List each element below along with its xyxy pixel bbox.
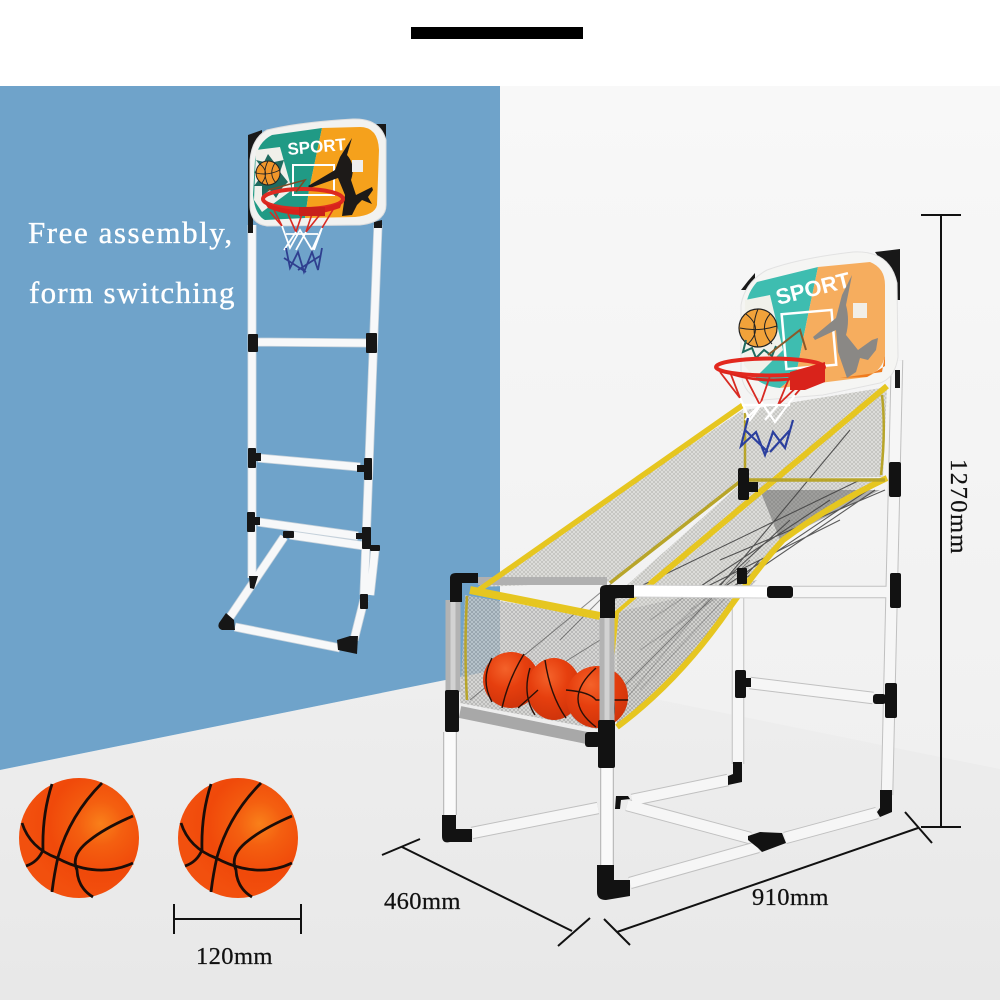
dimension: 1270mm: 1270mm [945,459,972,555]
balls in basket [483,652,628,728]
backboard corners [248,124,386,233]
dimension: 910mm: 910mm [752,884,829,911]
dimension: 1270mm [921,215,972,827]
yellow ramp trim [466,386,887,727]
backboard corners [741,249,900,388]
hoop net [720,372,815,455]
basketball left [19,778,139,898]
dimension: 120mm: 120mm [196,943,273,970]
lower mesh funnel [610,478,887,727]
backboard [741,252,898,400]
hoop rim [716,330,825,390]
back panel mesh [745,387,887,479]
dimension: 460mm: 460mm [384,888,461,915]
frame tubes [230,225,378,648]
panel: blue background [0,86,500,770]
dimension: 460mm [382,839,590,946]
upper mesh ramp [478,410,745,587]
tray bar [460,712,587,738]
panel: right wall [500,86,1000,786]
hoop rim [263,180,343,216]
heading: free assembly text: Free assembly, [28,215,234,250]
top bar highlight [634,591,767,592]
product: shooting arcade [442,249,901,900]
panel: floor [0,669,1000,1000]
backboard art [253,128,322,220]
back silver bar [478,577,607,585]
product: shooting arcade: SPORT [773,267,853,310]
backboard art [746,267,818,388]
back frame tubes [472,360,897,883]
backboard [250,119,386,226]
dimension: 120mm [174,904,301,970]
front tubes [450,600,607,865]
lower basket mesh [460,595,602,730]
black joints [442,462,901,900]
dimension: 910mm [604,812,932,945]
heading: free assembly text [28,215,236,310]
black joints [218,333,380,654]
dark net streaks [612,430,885,700]
product: folded hoop stand [218,119,386,654]
hoop net [270,208,334,272]
product: folded hoop stand: SPORT [287,135,347,159]
title bar [411,27,583,39]
basketball right [178,778,298,898]
heading: free assembly text: form switching [29,275,236,310]
